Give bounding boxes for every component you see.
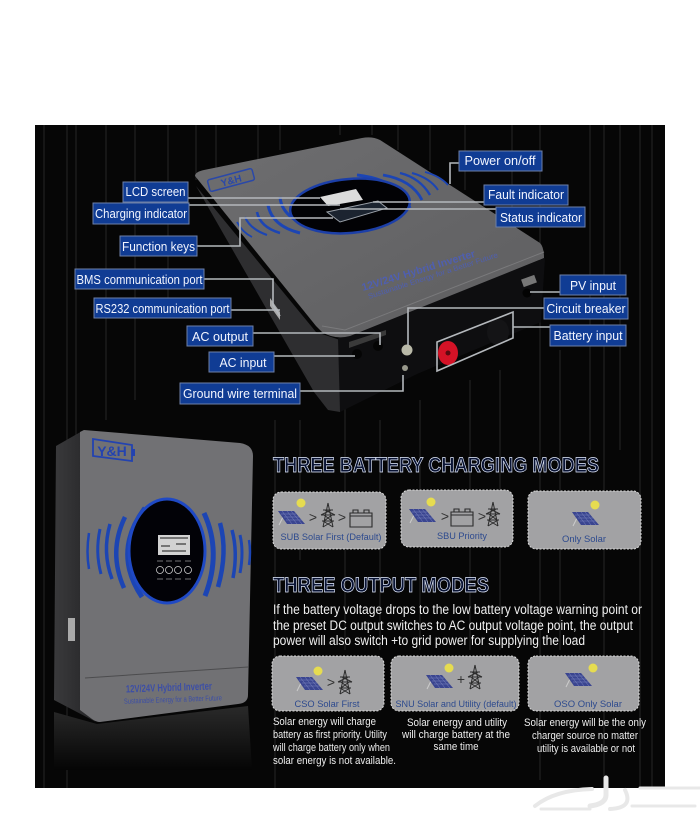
LCD front [158, 535, 190, 555]
label: LCD screen: LCD screen [126, 185, 186, 199]
panel: CSO Solar First [272, 656, 384, 711]
caption: OSO: Solar energy will be the only [524, 717, 647, 729]
leader: PV input [530, 291, 560, 293]
ports right side [352, 349, 362, 359]
icon: Y&H logo top: Y&H [220, 173, 243, 189]
panel: CSO Solar First: CSO Solar First [294, 699, 360, 710]
label: Fault indicator: Fault indicator [488, 188, 564, 202]
label: BMS communication port: BMS communication port [76, 273, 203, 287]
label: Fault indicator [484, 185, 568, 205]
panel: Only Solar: Only Solar [562, 534, 607, 545]
panel: SUB Solar First [273, 492, 386, 549]
caption: OSO: charger source no matter [532, 730, 638, 742]
icon: Y&H logo front: Y&H [97, 443, 127, 459]
panel: SUB Solar First: > [309, 509, 317, 525]
panel: SNU Solar and Utility [391, 656, 519, 711]
leader: Status indicator [340, 208, 496, 210]
panel: SBU Priority [401, 490, 513, 547]
text block: output description: power will also switch +to grid power for supplying the load [273, 633, 585, 648]
label: AC output [187, 326, 253, 346]
icon: sun [296, 498, 306, 508]
leader: Charging indicator [189, 204, 340, 206]
label: Battery input: Battery input [554, 329, 623, 343]
display circle top [288, 174, 412, 238]
icon: Y&H logo top [207, 168, 255, 193]
panel: SBU Priority: SBU Priority [437, 531, 487, 542]
device front [80, 430, 253, 722]
panel: CSO Solar First: > [327, 674, 335, 690]
leader: AC output [253, 333, 380, 345]
device print: model: 12V/24V Hybrid Inverter [360, 248, 477, 294]
device left side [196, 186, 340, 412]
label: AC input [209, 352, 274, 372]
leader: Battery input [513, 326, 550, 328]
caption: CSO: solar energy is not available. [273, 755, 396, 767]
device print: model front: 12V/24V Hybrid Inverter [126, 681, 212, 695]
leader: AC input [274, 355, 355, 357]
background panel [35, 125, 665, 788]
label: Battery input [550, 325, 626, 346]
panel: SNU Solar and Utility: SNU Solar and Utility (default) [396, 699, 516, 710]
text block: output description [273, 602, 642, 648]
device print: slogan: Sustainable Energy for a Better Future [367, 250, 499, 301]
label: Charging indicator: Charging indicator [95, 207, 187, 221]
heading: three battery charging modes: THREE BATTERY CHARGING MODES [273, 454, 599, 477]
panel: SNU Solar and Utility: + [457, 671, 465, 687]
panel: OSO Only Solar [528, 656, 639, 711]
caption: SNU: will charge battery at the [401, 729, 510, 741]
caption: CSO: battery as first priority. Utility [273, 729, 388, 741]
label: Function keys [120, 236, 197, 256]
label: RS232 communication port [94, 298, 231, 318]
blue arcs top [237, 172, 448, 237]
comm port front [68, 618, 75, 641]
label: LCD screen [123, 182, 188, 202]
LCD top [320, 189, 363, 206]
display circle front [129, 499, 205, 603]
function keys front [156, 561, 192, 579]
reflection [54, 706, 252, 770]
comm ports [270, 298, 280, 320]
label: RS232 communication port: RS232 communication port [96, 302, 230, 316]
leader: BMS port [204, 279, 280, 316]
text block: output description: If the battery voltage drops to the low battery voltage warning point or [273, 602, 642, 617]
label: Charging indicator [93, 203, 189, 224]
device side [54, 430, 96, 722]
leader: Ground wire [300, 375, 403, 391]
device right side [338, 258, 545, 412]
leader: Power on/off [450, 163, 459, 184]
label: Power on/off [459, 151, 542, 171]
label: AC output: AC output [192, 330, 249, 344]
panel: SUB Solar First: > [338, 509, 346, 525]
watermark [535, 778, 700, 809]
caption: OSO: utility is available or not [537, 743, 635, 755]
caption: OSO [524, 717, 647, 755]
panel: SBU Priority: > [478, 508, 486, 524]
heading: three output modes: THREE OUTPUT MODES [273, 574, 489, 597]
caption: CSO: Solar energy will charge [273, 716, 376, 728]
indicators top [327, 201, 387, 222]
label: Circuit breaker [544, 298, 628, 319]
device: front inverter [54, 430, 253, 770]
PV port [521, 275, 537, 287]
battery terminals [438, 341, 458, 365]
leader: Function keys [197, 218, 333, 246]
label: AC input: AC input [220, 356, 267, 370]
caption: SNU: same time [434, 741, 479, 753]
label: Status indicator: Status indicator [500, 211, 582, 225]
label: Status indicator [496, 207, 585, 227]
device top face [195, 137, 544, 337]
label: Power on/off: Power on/off [464, 154, 536, 168]
label: PV input [560, 275, 626, 295]
caption: SNU [401, 717, 510, 753]
leader: Fault indicator [373, 201, 484, 203]
panel: SBU Priority: > [441, 508, 449, 524]
panel: OSO Only Solar: OSO Only Solar [554, 699, 623, 710]
caption: SNU: Solar energy and utility [407, 717, 508, 729]
caption: CSO: will charge battery only when [272, 742, 390, 754]
leader: LCD screen [188, 197, 320, 199]
text block: output description: the preset DC output switches to AC output voltage point, the output [273, 618, 633, 633]
leader: Circuit breaker [408, 308, 544, 345]
label: Ground wire terminal [180, 383, 300, 404]
label: BMS communication port [75, 269, 204, 289]
device: top inverter [195, 137, 545, 412]
icon: solar [278, 511, 305, 525]
label: Function keys: Function keys [122, 240, 195, 254]
label: Ground wire terminal: Ground wire terminal [183, 387, 297, 401]
caption: CSO [272, 716, 396, 767]
panel: Only Solar [528, 491, 641, 549]
leader: RS232 port [231, 309, 280, 311]
label: Circuit breaker: Circuit breaker [546, 302, 626, 316]
panel: SUB Solar First: SUB Solar First (Default) [280, 532, 382, 543]
device print: slogan front: Sustainable Energy for a Better Future [124, 693, 222, 706]
icon: Y&H logo front [93, 439, 135, 461]
label: PV input: PV input [570, 279, 617, 293]
blue arcs front [88, 508, 250, 597]
